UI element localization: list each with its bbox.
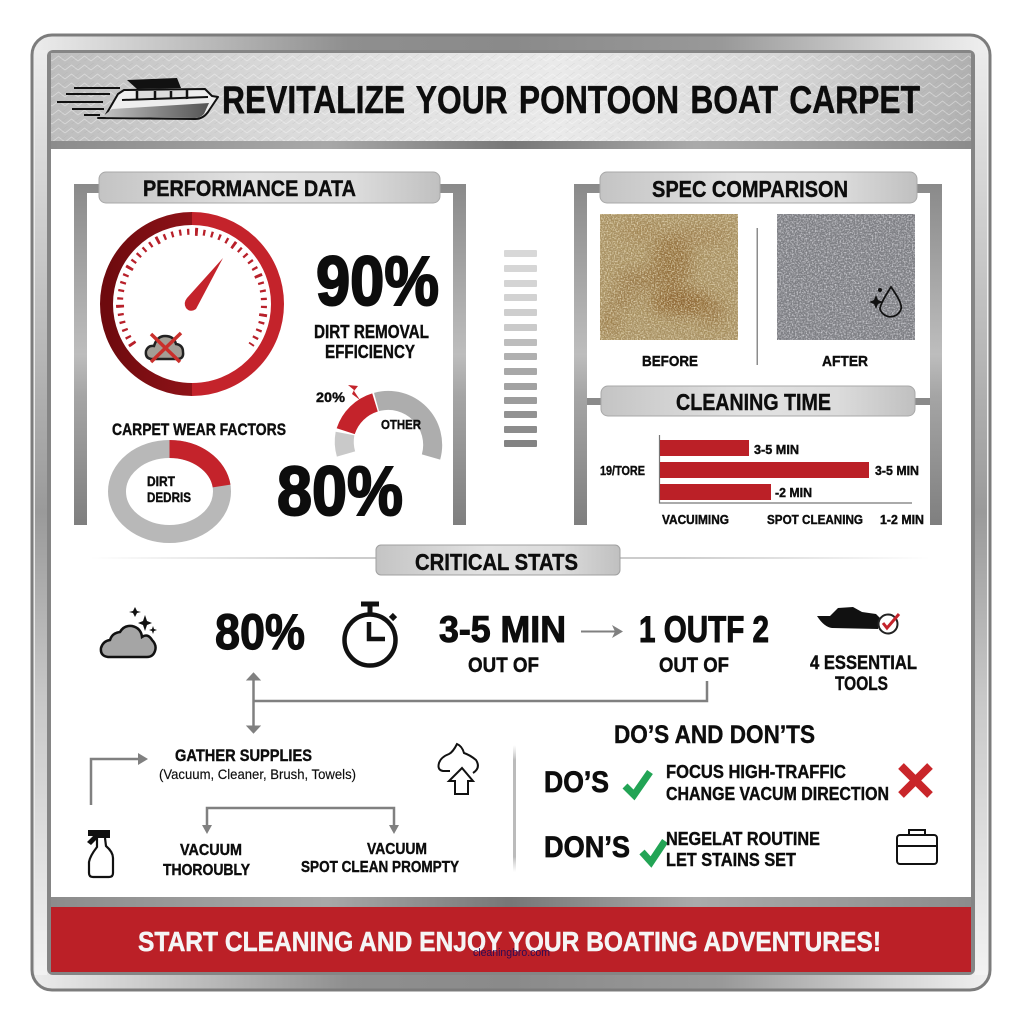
donut chart: dirt debris: DEDRIS bbox=[147, 490, 191, 505]
bar chart: cleaning time: 3-5 MIN bbox=[754, 442, 799, 457]
label: dirt removal efficiency: EFFICIENCY bbox=[325, 342, 415, 362]
arrow bbox=[581, 625, 623, 638]
panel: performance data bbox=[74, 172, 466, 534]
text: vacuum spot clean bbox=[301, 841, 459, 876]
after carpet swatch bbox=[777, 214, 915, 340]
panel: spec comparison bbox=[574, 172, 942, 527]
label: don's: DON’S bbox=[544, 831, 630, 864]
heading: carpet wear factors: CARPET WEAR FACTORS bbox=[112, 420, 286, 439]
section: critical stats bbox=[90, 545, 930, 695]
divider bbox=[756, 228, 758, 365]
bar chart: cleaning time: 19/TORE bbox=[600, 463, 645, 478]
footer call to action: START CLEANING AND ENJOY YOUR BOATING ADVENTURES! bbox=[138, 926, 881, 957]
connector arrows bbox=[247, 673, 707, 733]
text: vacuum spot clean: VACUUM bbox=[367, 841, 427, 858]
bar chart: cleaning time: 3-5 MIN bbox=[875, 463, 919, 478]
donut chart: dirt debris: DIRT bbox=[147, 474, 176, 489]
stacked metal strips bbox=[504, 250, 537, 447]
text: don's list: NEGELAT ROUTINE bbox=[666, 829, 820, 849]
arrow: to gather supplies bbox=[91, 753, 148, 805]
label: dirt removal efficiency bbox=[314, 322, 429, 362]
half donut chart: OTHER bbox=[381, 417, 422, 432]
icon: crossed-out dirt cloud bbox=[146, 333, 183, 362]
label: out of: OUT OF bbox=[468, 654, 539, 677]
label: do's: DO’S bbox=[544, 766, 609, 799]
footer call to action bbox=[51, 897, 971, 972]
heading: cleaning time bbox=[587, 386, 930, 416]
text: do's list bbox=[666, 762, 889, 804]
section: steps bbox=[87, 744, 478, 879]
icon: green check bbox=[625, 772, 650, 795]
heading: do's and don'ts: DO’S AND DON’TS bbox=[614, 721, 815, 749]
heading: critical stats: CRITICAL STATS bbox=[415, 549, 578, 575]
watermark: cleaningbro.com bbox=[473, 947, 550, 959]
label: dirt removal efficiency: DIRT REMOVAL bbox=[314, 322, 429, 342]
header banner bbox=[51, 53, 971, 149]
stat: 3-5 min: 3-5 MIN bbox=[439, 609, 566, 650]
icon: speeding boat bbox=[57, 78, 218, 119]
text: vacuum thoroubly: THOROUBLY bbox=[163, 862, 250, 879]
icon: green check bbox=[642, 841, 665, 862]
text: don's list: LET STAINS SET bbox=[666, 850, 796, 870]
icon: sparkling cloud bbox=[101, 607, 157, 657]
half donut chart bbox=[316, 385, 433, 457]
donut chart: dirt debris bbox=[117, 449, 222, 534]
gauge bbox=[106, 218, 278, 390]
heading: performance data bbox=[99, 172, 440, 203]
icon: cloud with up arrow bbox=[438, 744, 478, 794]
arrow: branching steps bbox=[202, 808, 399, 834]
text: gather supplies: (Vacuum, Cleaner, Brush, Towels) bbox=[159, 766, 356, 782]
icon: boat with check bbox=[817, 607, 899, 634]
label: 4 essential tools bbox=[810, 653, 917, 695]
label: after: AFTER bbox=[822, 353, 868, 370]
stat: 80 percent: 80% bbox=[277, 452, 403, 530]
label: before: BEFORE bbox=[642, 353, 698, 370]
bar chart: cleaning time: VACUIMING bbox=[662, 512, 729, 527]
text: don's list bbox=[666, 829, 820, 870]
bar chart: cleaning time: -2 MIN bbox=[775, 485, 812, 500]
heading: performance data: PERFORMANCE DATA bbox=[143, 176, 356, 201]
text: vacuum thoroubly bbox=[163, 842, 250, 879]
panel: do's and don'ts bbox=[513, 721, 937, 872]
icon: red cross bbox=[901, 766, 930, 795]
text: do's list: CHANGE VACUM DIRECTION bbox=[666, 784, 889, 804]
stat: 1 outf 2: 1 OUTF 2 bbox=[639, 609, 769, 650]
icon: spray bottle bbox=[87, 830, 113, 877]
heading: critical stats bbox=[376, 545, 620, 575]
label: 4 essential tools: TOOLS bbox=[835, 674, 888, 695]
icon: stopwatch bbox=[344, 604, 396, 666]
half donut chart: 20% bbox=[316, 389, 346, 405]
bar chart: cleaning time: 1-2 MIN bbox=[880, 512, 924, 527]
text: gather supplies bbox=[159, 746, 356, 782]
heading: spec comparison bbox=[600, 172, 917, 203]
stat: 80 percent: 80% bbox=[215, 604, 305, 660]
text: vacuum thoroubly: VACUUM bbox=[180, 842, 242, 859]
bar chart: cleaning time bbox=[600, 435, 924, 527]
icon: briefcase bbox=[897, 830, 937, 864]
heading: spec comparison: SPEC COMPARISON bbox=[652, 176, 848, 202]
icon: water drop with sparkle bbox=[869, 287, 901, 317]
before carpet swatch bbox=[600, 214, 738, 340]
text: vacuum spot clean: SPOT CLEAN PROMPTY bbox=[301, 859, 459, 876]
bar chart: cleaning time: SPOT CLEANING bbox=[767, 512, 863, 527]
label: 4 essential tools: 4 ESSENTIAL bbox=[810, 653, 917, 674]
text: gather supplies: GATHER SUPPLIES bbox=[175, 746, 312, 765]
text: do's list: FOCUS HIGH-TRAFFIC bbox=[666, 762, 846, 782]
label: out of: OUT OF bbox=[659, 654, 729, 677]
heading: cleaning time: CLEANING TIME bbox=[676, 389, 831, 415]
stat: 90 percent: 90% bbox=[316, 242, 439, 320]
